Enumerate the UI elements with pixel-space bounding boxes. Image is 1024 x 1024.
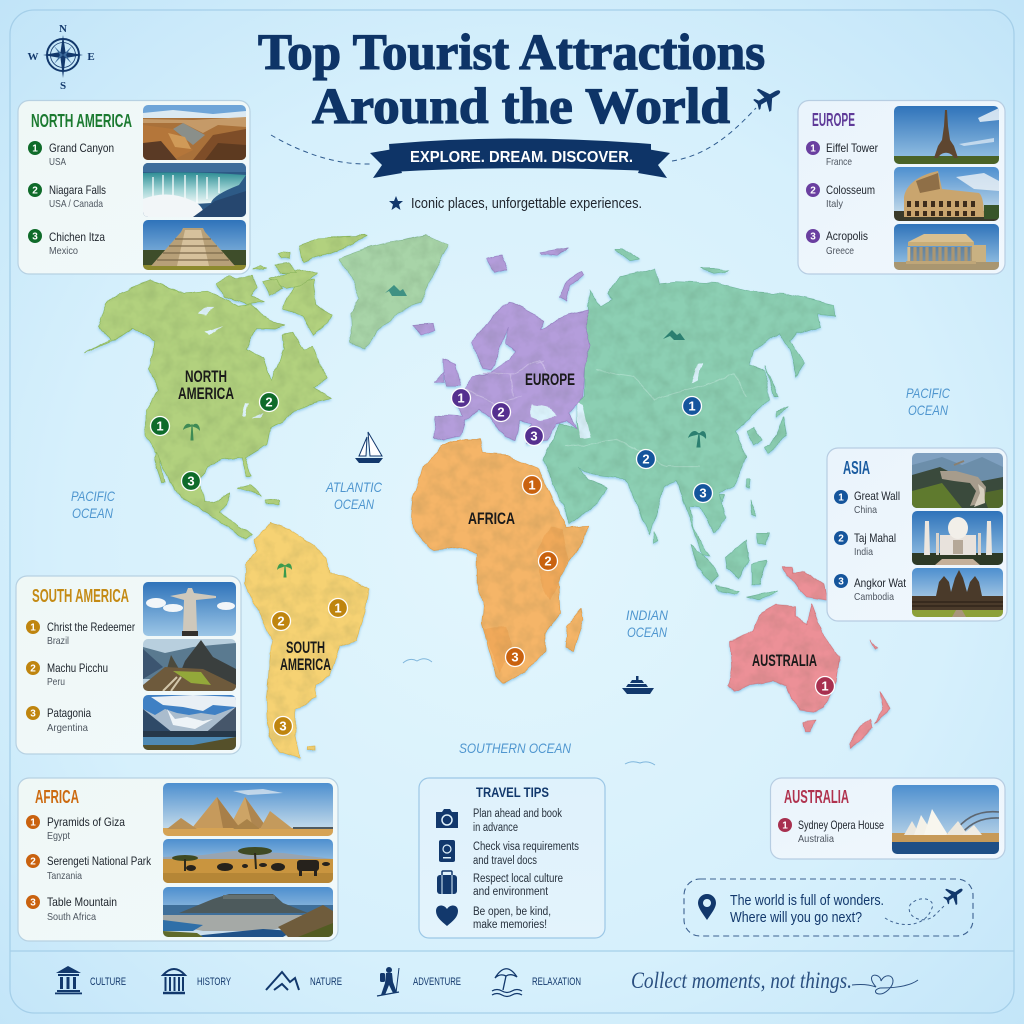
item: taj mahal: 2	[838, 534, 844, 544]
item: angkor wat: Cambodia	[854, 591, 894, 603]
compass rose: S	[60, 80, 66, 92]
panel: south america	[16, 576, 241, 754]
ocean label: atlantic: OCEAN	[334, 496, 375, 512]
item: sydney opera house: Australia	[798, 833, 834, 845]
item: chichen itza	[28, 229, 105, 257]
title: Top Tourist Attractions	[258, 25, 765, 81]
photo: table mountain	[163, 887, 333, 937]
panel: travel tips	[419, 778, 605, 938]
item: taj mahal: India	[854, 546, 873, 558]
item: taj mahal: Taj Mahal	[854, 531, 896, 545]
markers: asia: 3	[699, 486, 707, 500]
markers: europe: 2	[497, 404, 505, 420]
markers: europe: 1	[457, 390, 465, 406]
tip: plan ahead: Plan ahead and book	[473, 808, 562, 820]
photo: pyramids of giza	[163, 783, 333, 836]
item: pyramids of giza	[26, 815, 125, 842]
markers: south america: 1	[334, 600, 342, 616]
item: serengeti national park: Serengeti National Park	[47, 854, 152, 868]
map label: north america: NORTH	[185, 368, 227, 386]
item: chichen itza: Mexico	[49, 245, 78, 257]
ocean label: indian	[626, 607, 669, 640]
item: great wall: 1	[838, 492, 844, 504]
icon: palm south america	[277, 563, 292, 577]
item: christ the redeemer	[26, 620, 135, 647]
ocean label: pacific left	[71, 488, 116, 521]
tip: check visa	[473, 841, 579, 867]
panel: africa	[18, 778, 338, 941]
item: serengeti national park: Tanzania	[47, 870, 82, 882]
item: great wall: China	[854, 504, 877, 516]
callout text: The world is full of wonders.	[730, 893, 884, 909]
ocean label: pacific left: PACIFIC	[71, 488, 116, 504]
callout text	[730, 893, 884, 926]
world map	[71, 235, 951, 765]
icon: location pin	[698, 894, 716, 920]
dashed loop path	[885, 899, 945, 925]
category: history: HISTORY	[197, 976, 231, 988]
photo: grand canyon	[143, 105, 246, 160]
compass rose	[28, 23, 95, 92]
item: sydney opera house: 1	[782, 820, 788, 832]
item: eiffel tower	[806, 141, 878, 168]
item: eiffel tower: 1	[810, 144, 816, 154]
tip: plan ahead: in advance	[473, 822, 518, 834]
callout text: Where will you go next?	[730, 910, 862, 926]
item: niagara falls	[28, 183, 106, 210]
item: chichen itza: Chichen Itza	[49, 230, 105, 244]
markers: africa	[506, 476, 558, 666]
icon: greenland mountains	[385, 285, 407, 296]
markers: asia: 2	[642, 452, 650, 466]
ocean label: indian: OCEAN	[627, 624, 668, 640]
markers: south america: 3	[279, 718, 287, 734]
photo: acropolis	[894, 224, 999, 270]
script slogan: Collect moments, not things.	[631, 968, 852, 993]
tip: respect local culture: Respect local culture	[473, 873, 563, 885]
category: relaxation	[492, 969, 581, 996]
footer divider	[10, 950, 1014, 952]
markers: europe	[452, 388, 544, 446]
ocean label: southern: SOUTHERN OCEAN	[459, 740, 572, 756]
item: eiffel tower: Eiffel Tower	[826, 141, 878, 155]
item: grand canyon: USA	[49, 156, 66, 168]
footer categories	[55, 966, 918, 996]
item: niagara falls: 2	[32, 186, 38, 196]
markers: asia: 1	[688, 398, 696, 414]
ocean label: indian: INDIAN	[626, 607, 669, 623]
item: pyramids of giza: Egypt	[47, 830, 70, 842]
markers: north america: 3	[187, 474, 195, 488]
heading: north america: NORTH AMERICA	[31, 111, 132, 131]
category: adventure	[377, 967, 461, 996]
item: pyramids of giza: 1	[30, 818, 36, 828]
item: table mountain: South Africa	[47, 911, 96, 923]
compass rose: E	[87, 51, 95, 63]
photo: angkor wat	[912, 568, 1003, 617]
map label: africa: AFRICA	[468, 510, 515, 528]
tip: respect local culture	[473, 873, 563, 898]
item: sydney opera house: Sydney Opera House	[798, 818, 884, 832]
ocean label: atlantic: ATLANTIC	[325, 479, 383, 495]
dashed flight path right	[672, 108, 756, 161]
item: machu picchu: Peru	[47, 676, 65, 688]
tip: plan ahead	[473, 808, 562, 834]
item: acropolis: Acropolis	[826, 229, 868, 243]
heading: australia: AUSTRALIA	[784, 787, 849, 807]
photo: serengeti	[163, 839, 333, 883]
item: grand canyon	[28, 141, 114, 168]
photo: niagara falls	[143, 163, 246, 217]
item: machu picchu	[26, 661, 108, 688]
panel: north america	[18, 100, 250, 274]
item: grand canyon: 1	[32, 144, 38, 154]
compass rose: W	[28, 51, 38, 63]
markers: europe: 3	[530, 428, 538, 444]
icon: palm asia	[688, 431, 706, 447]
item: table mountain: Table Mountain	[47, 895, 117, 909]
photo: taj mahal	[912, 511, 1003, 565]
item: acropolis: 3	[810, 232, 816, 242]
item: chichen itza: 3	[32, 232, 38, 242]
category: adventure: ADVENTURE	[413, 976, 461, 988]
item: colosseum	[806, 183, 875, 210]
compass rose: N	[59, 23, 67, 35]
category: nature	[266, 972, 342, 990]
item: machu picchu: Machu Picchu	[47, 661, 108, 675]
item: christ the redeemer: Brazil	[47, 635, 69, 647]
icon: camera	[436, 809, 458, 828]
item: great wall: Great Wall	[854, 489, 900, 503]
markers: africa: 2	[544, 554, 552, 568]
item: acropolis	[806, 229, 868, 257]
item: serengeti national park: 2	[30, 856, 36, 868]
item: niagara falls: USA / Canada	[49, 198, 103, 210]
tip: be open: make memories!	[473, 919, 547, 931]
item: grand canyon: Grand Canyon	[49, 141, 114, 155]
continent: europe	[413, 248, 590, 443]
item: great wall	[834, 489, 900, 516]
ocean label: pacific right	[906, 385, 951, 418]
icon: heart	[436, 905, 458, 926]
ribbon banner	[370, 138, 670, 178]
item: colosseum: 2	[810, 186, 816, 196]
item: pyramids of giza: Pyramids of Giza	[47, 815, 125, 829]
ribbon banner: EXPLORE. DREAM. DISCOVER.	[410, 149, 633, 166]
continent: africa	[410, 440, 588, 683]
category: culture	[55, 966, 126, 994]
heading: africa: AFRICA	[35, 787, 79, 807]
ocean label: atlantic	[325, 479, 383, 512]
map label: europe: EUROPE	[525, 371, 575, 389]
tip: be open: Be open, be kind,	[473, 906, 551, 918]
icon: passport	[439, 840, 455, 862]
item: angkor wat: Angkor Wat	[854, 576, 907, 590]
continent: greenland	[338, 235, 448, 350]
category: culture: CULTURE	[90, 976, 126, 988]
icon: palm north america	[183, 424, 200, 440]
heading: travel tips: TRAVEL TIPS	[476, 785, 549, 800]
callout: where will you go next	[684, 879, 973, 936]
item: niagara falls: Niagara Falls	[49, 183, 106, 197]
continent: southeast asia islands	[690, 478, 777, 600]
photo: sydney opera house	[892, 785, 999, 854]
dashed flight path left	[271, 135, 370, 164]
item: table mountain	[26, 895, 117, 923]
map label: north america: AMERICA	[178, 385, 234, 403]
title	[258, 25, 765, 135]
continent: south america	[245, 523, 370, 758]
tip: be open	[473, 906, 551, 931]
map label: australia: AUSTRALIA	[752, 652, 817, 670]
item: angkor wat: 3	[838, 576, 844, 588]
marker: australia: 1	[821, 678, 829, 694]
photo: eiffel tower	[894, 106, 999, 164]
photo: christ the redeemer	[143, 582, 236, 636]
icon: small airplane	[940, 881, 968, 909]
category: relaxation: RELAXATION	[532, 976, 581, 988]
markers: africa: 3	[511, 650, 519, 664]
item: patagonia: 3	[30, 708, 36, 720]
tip: check visa: and travel docs	[473, 855, 537, 867]
ocean label: pacific left: OCEAN	[72, 505, 114, 521]
photo: chichen itza	[143, 220, 246, 270]
icon: asia mountains	[663, 330, 685, 340]
title: Around the World	[312, 79, 730, 135]
item: acropolis: Greece	[826, 245, 854, 257]
panel: europe	[798, 100, 1005, 274]
continent: australia and oceania	[728, 567, 890, 750]
item: christ the redeemer: 1	[30, 622, 36, 634]
map label: north america	[178, 368, 234, 403]
item: patagonia	[26, 706, 91, 734]
category: nature: NATURE	[310, 976, 342, 988]
markers: north america	[150, 392, 278, 490]
marker: australia	[816, 676, 834, 696]
item: machu picchu: 2	[30, 664, 36, 674]
photo: colosseum	[894, 167, 999, 221]
heading: south america: SOUTH AMERICA	[32, 586, 129, 606]
photo: great wall	[912, 453, 1003, 508]
tip: check visa: Check visa requirements	[473, 841, 579, 853]
landmasses	[85, 235, 890, 758]
tagline: Iconic places, unforgettable experiences.	[411, 196, 642, 212]
icon: sailboat	[355, 432, 383, 463]
decorative waves	[403, 659, 655, 765]
item: patagonia: Patagonia	[47, 706, 91, 720]
category: history	[163, 969, 231, 993]
heading: europe: EUROPE	[812, 110, 855, 130]
item: table mountain: 3	[30, 898, 36, 908]
item: serengeti national park	[26, 854, 152, 882]
markers: africa: 1	[528, 478, 536, 492]
item: sydney opera house	[778, 818, 884, 845]
continent: north america	[85, 237, 367, 540]
map label: south america	[280, 639, 331, 674]
panel: asia	[827, 448, 1007, 621]
icon: suitcase	[437, 871, 457, 894]
ocean label: pacific right: PACIFIC	[906, 385, 951, 401]
markers: south america: 2	[277, 614, 285, 628]
photo: patagonia	[143, 695, 236, 750]
markers: asia	[636, 396, 712, 502]
icon: cruise ship	[622, 676, 654, 694]
item: colosseum: Colosseum	[826, 183, 875, 197]
heading: asia: ASIA	[843, 458, 870, 478]
map label: south america: SOUTH	[286, 639, 325, 657]
icon: airplane	[750, 80, 786, 116]
tip: respect local culture: and environment	[473, 886, 549, 898]
item: colosseum: Italy	[826, 198, 844, 210]
continent: asia	[543, 248, 835, 557]
ocean label: pacific right: OCEAN	[908, 402, 949, 418]
panel: australia	[770, 778, 1005, 859]
markers: north america: 1	[156, 418, 164, 434]
item: angkor wat	[834, 574, 907, 603]
item: christ the redeemer: Christ the Redeemer	[47, 620, 135, 634]
item: patagonia: Argentina	[47, 722, 88, 734]
item: taj mahal	[834, 531, 896, 558]
photo: machu picchu	[143, 639, 236, 691]
markers: north america: 2	[265, 394, 273, 410]
markers: south america	[272, 598, 348, 736]
map label: south america: AMERICA	[280, 656, 331, 674]
item: eiffel tower: France	[826, 156, 852, 168]
